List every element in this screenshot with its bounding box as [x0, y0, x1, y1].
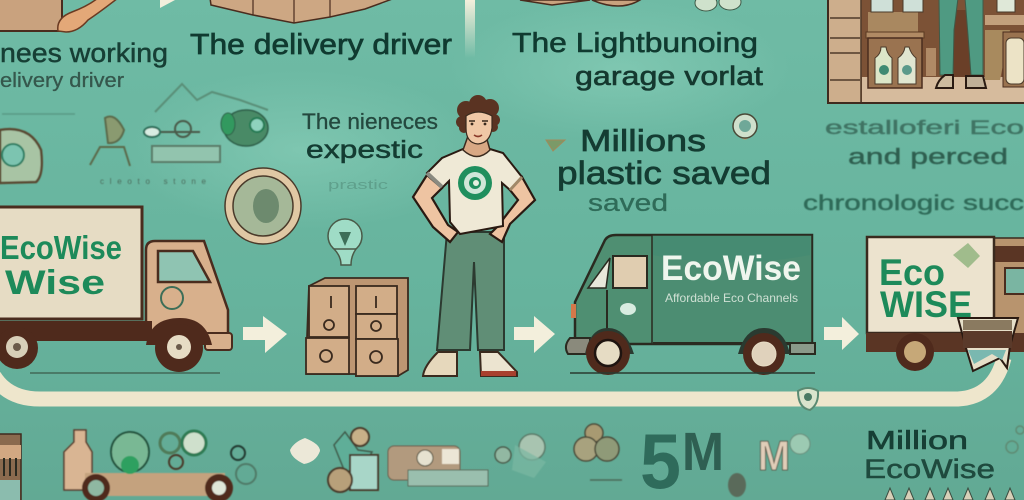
arrow 3: [824, 317, 859, 350]
heading: millions plastic saved: plastic saved: [557, 155, 771, 191]
text block: nieneces expestic: [302, 109, 438, 192]
right truck logo: Eco: [879, 252, 945, 293]
truck: left ecowise: [0, 207, 232, 373]
shoes: [423, 352, 517, 376]
van: ecowise green: [566, 235, 815, 375]
heading: employees working: elivery driver: [0, 70, 124, 92]
heading: the delivery driver: The delivery driver: [190, 29, 452, 61]
icon: coin pile: [574, 424, 622, 480]
van brand text: Affordable Eco Channels: [665, 291, 798, 305]
panel: top packages: [520, 0, 741, 11]
icon: small badge: [733, 114, 757, 140]
bottom shelf left: [0, 434, 21, 500]
right truck logo: [879, 252, 972, 325]
text block: million ecowise: [864, 425, 995, 484]
icon: abstract mountain logo: [90, 84, 268, 186]
shopkeeper legs: [936, 0, 986, 88]
figure: person standing: [413, 95, 535, 376]
icon: shop bottles: [871, 0, 1024, 84]
truck: right ecowise: [866, 237, 1024, 371]
icon: road marker: [798, 388, 818, 410]
truck logo text: EcoWise: [0, 229, 122, 266]
heading: lightbunoing garage: [512, 27, 764, 91]
text block: million ecowise: Million: [866, 425, 968, 455]
icon: stacked boxes: [306, 278, 408, 376]
wheels: [0, 318, 212, 372]
head: [456, 95, 500, 156]
right truck logo: WISE: [880, 284, 972, 325]
road timeline: [0, 358, 1004, 399]
text block: right side captions: estalloferi Eco: [825, 118, 1024, 139]
heading: employees working: [0, 38, 168, 92]
icon cluster: upper-left emblem: [0, 114, 75, 183]
panel: garage shop: [828, 0, 1024, 103]
arrow 2: [514, 316, 555, 353]
truck logo text: Wise: [5, 264, 105, 302]
shirt logo: [458, 166, 492, 200]
icon: abstract mountain logo: cleoto stone: [100, 177, 207, 186]
text block: right side captions: and perced: [848, 144, 1008, 169]
icon: M figure: [728, 432, 810, 497]
text block: nieneces expestic: expestic: [306, 136, 423, 164]
shirt: [427, 149, 522, 234]
icon: light bulb: [328, 219, 362, 265]
van brand text: EcoWise: [661, 249, 801, 288]
van brand text: [661, 249, 801, 305]
heading: lightbunoing garage: garage vorlat: [575, 61, 764, 91]
icon: corner sprig: [1006, 426, 1024, 453]
text block: nieneces expestic: The nieneces: [302, 109, 438, 134]
icon: M figure: M: [758, 432, 790, 479]
panel: top-left scene: [0, 0, 118, 32]
stat: 5M: [640, 417, 724, 500]
curly hair: [456, 95, 500, 133]
pants: [437, 232, 504, 350]
text block: million ecowise: EcoWise: [864, 454, 995, 484]
text block: nieneces expestic: prastic: [328, 177, 389, 192]
heading: millions plastic saved: Millions: [580, 123, 706, 158]
arms: [413, 175, 458, 242]
shield badge: [958, 318, 1018, 371]
arrow 1: [243, 316, 287, 353]
heading: employees working: nees working: [0, 38, 168, 68]
van wheels: [585, 328, 790, 375]
icon: cream blob: [290, 438, 320, 464]
heading: lightbunoing garage: The Lightbunoing: [512, 27, 758, 58]
icon: sprig: [546, 140, 565, 151]
truck logo text: [0, 229, 122, 302]
icon: green swirl leaf: [221, 110, 268, 146]
panel: top-center boxes: [210, 0, 395, 23]
heading: millions plastic saved: saved: [588, 190, 668, 217]
stat: 5M: M: [682, 422, 724, 482]
heading: millions plastic saved: [557, 123, 771, 217]
bottom building cluster: [328, 428, 546, 492]
icon: coin badge: [225, 168, 301, 244]
text block: right side captions: [803, 118, 1024, 215]
text block: right side captions: chronologic succ: [803, 192, 1024, 215]
bottom truck with eco icons: [64, 430, 256, 500]
icon row: small bottles: [885, 488, 1015, 500]
